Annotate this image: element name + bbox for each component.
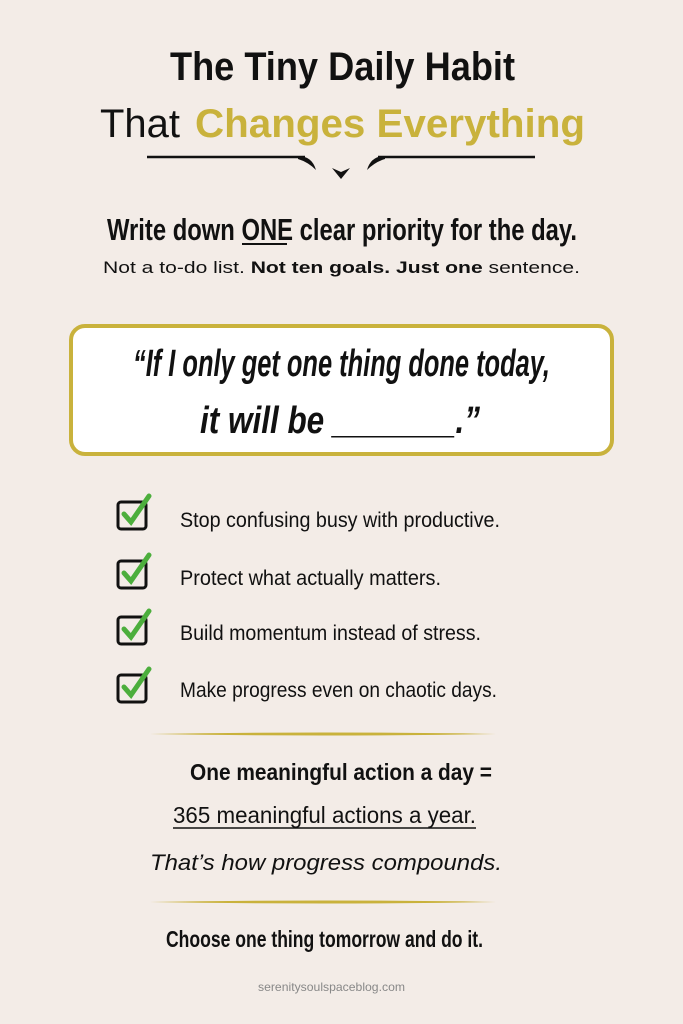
item 4: Make progress even on chaotic days. (180, 679, 497, 702)
call to action: Choose one thing tomorrow and do it. (166, 926, 483, 952)
subtitle: That (100, 102, 180, 146)
equation line: One meaningful action a day = (190, 759, 492, 785)
item 3 (118, 611, 481, 645)
quote text: it will be _______.” (200, 400, 480, 442)
item 1: Stop confusing busy with productive. (180, 509, 500, 532)
ornament divider (147, 156, 535, 179)
sub instruction: Not a to-do list. Not ten goals. Just one sentence. (103, 258, 580, 277)
subtitle: Changes Everything (195, 102, 585, 146)
compounding note: That’s how progress compounds. (150, 850, 502, 875)
footer url: serenitysoulspaceblog.com (258, 980, 405, 994)
quote box (71, 326, 612, 454)
checklist (118, 496, 500, 702)
item 4 (118, 669, 497, 702)
item 2: Protect what actually matters. (180, 567, 441, 590)
quote text (133, 343, 550, 442)
item 1 (118, 496, 500, 532)
item 3: Build momentum instead of stress. (180, 622, 481, 645)
item 2 (118, 555, 441, 590)
yearly result: 365 meaningful actions a year. (173, 802, 476, 828)
title: The Tiny Daily Habit (170, 45, 515, 89)
